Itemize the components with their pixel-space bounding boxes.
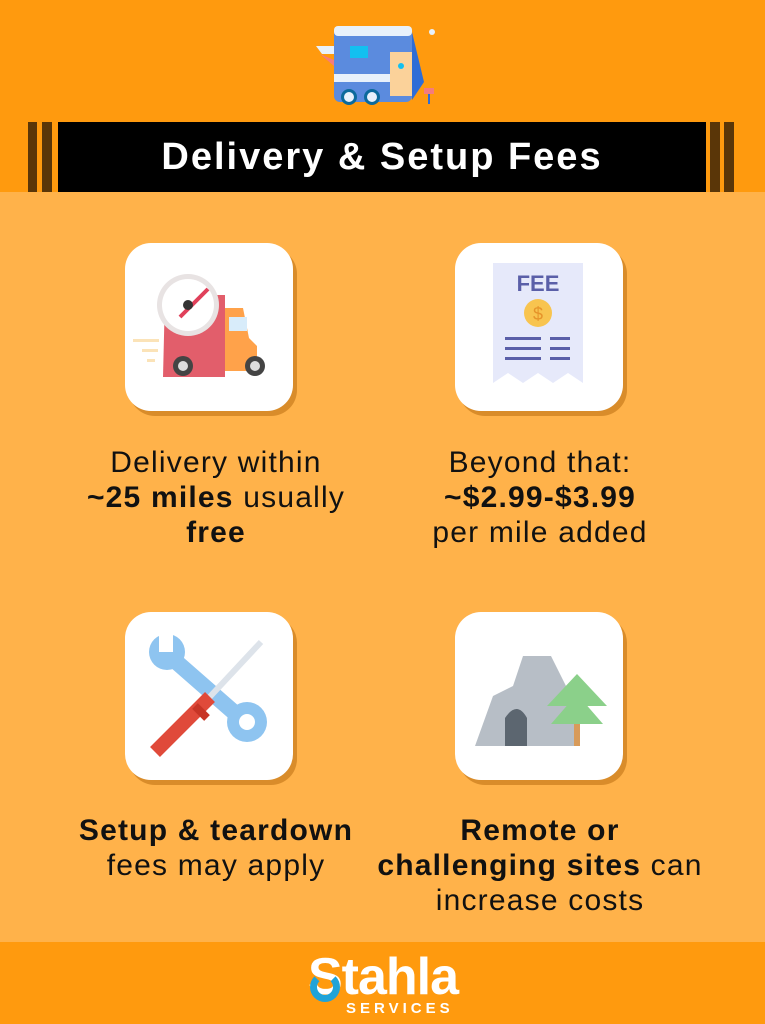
text: remote: challenging sites can <box>377 849 703 882</box>
icon: camper trailer <box>316 26 435 105</box>
card: tools <box>125 612 293 780</box>
top band <box>0 0 765 192</box>
text: setup <box>79 814 353 882</box>
title <box>58 122 706 192</box>
card: fee receipt <box>455 243 623 411</box>
card: fee receipt: FEE <box>517 271 559 296</box>
text: beyond <box>432 446 648 549</box>
text: remote: Remote or <box>460 814 620 847</box>
text: remote <box>377 814 703 917</box>
title banner <box>28 122 734 192</box>
title: Delivery & Setup Fees <box>161 136 603 178</box>
card: delivery truck <box>125 243 293 411</box>
text: delivery: Delivery within <box>110 446 322 479</box>
logo: Stahla <box>308 948 458 1006</box>
text: setup: Setup & teardown <box>79 814 353 847</box>
footer <box>0 942 765 1024</box>
text: setup: fees may apply <box>107 849 325 882</box>
text: beyond: Beyond that: <box>449 446 631 479</box>
text: beyond: per mile added <box>432 516 648 549</box>
text: remote: increase costs <box>436 884 644 917</box>
card: fee receipt: $ <box>533 304 543 324</box>
card: remote site <box>455 612 623 780</box>
text: beyond: ~$2.99-$3.99 <box>444 481 636 514</box>
text: delivery: ~25 miles usually <box>87 481 345 514</box>
text: delivery: free <box>186 516 246 549</box>
text: delivery <box>87 446 345 549</box>
logo: SERVICES <box>346 1000 454 1017</box>
